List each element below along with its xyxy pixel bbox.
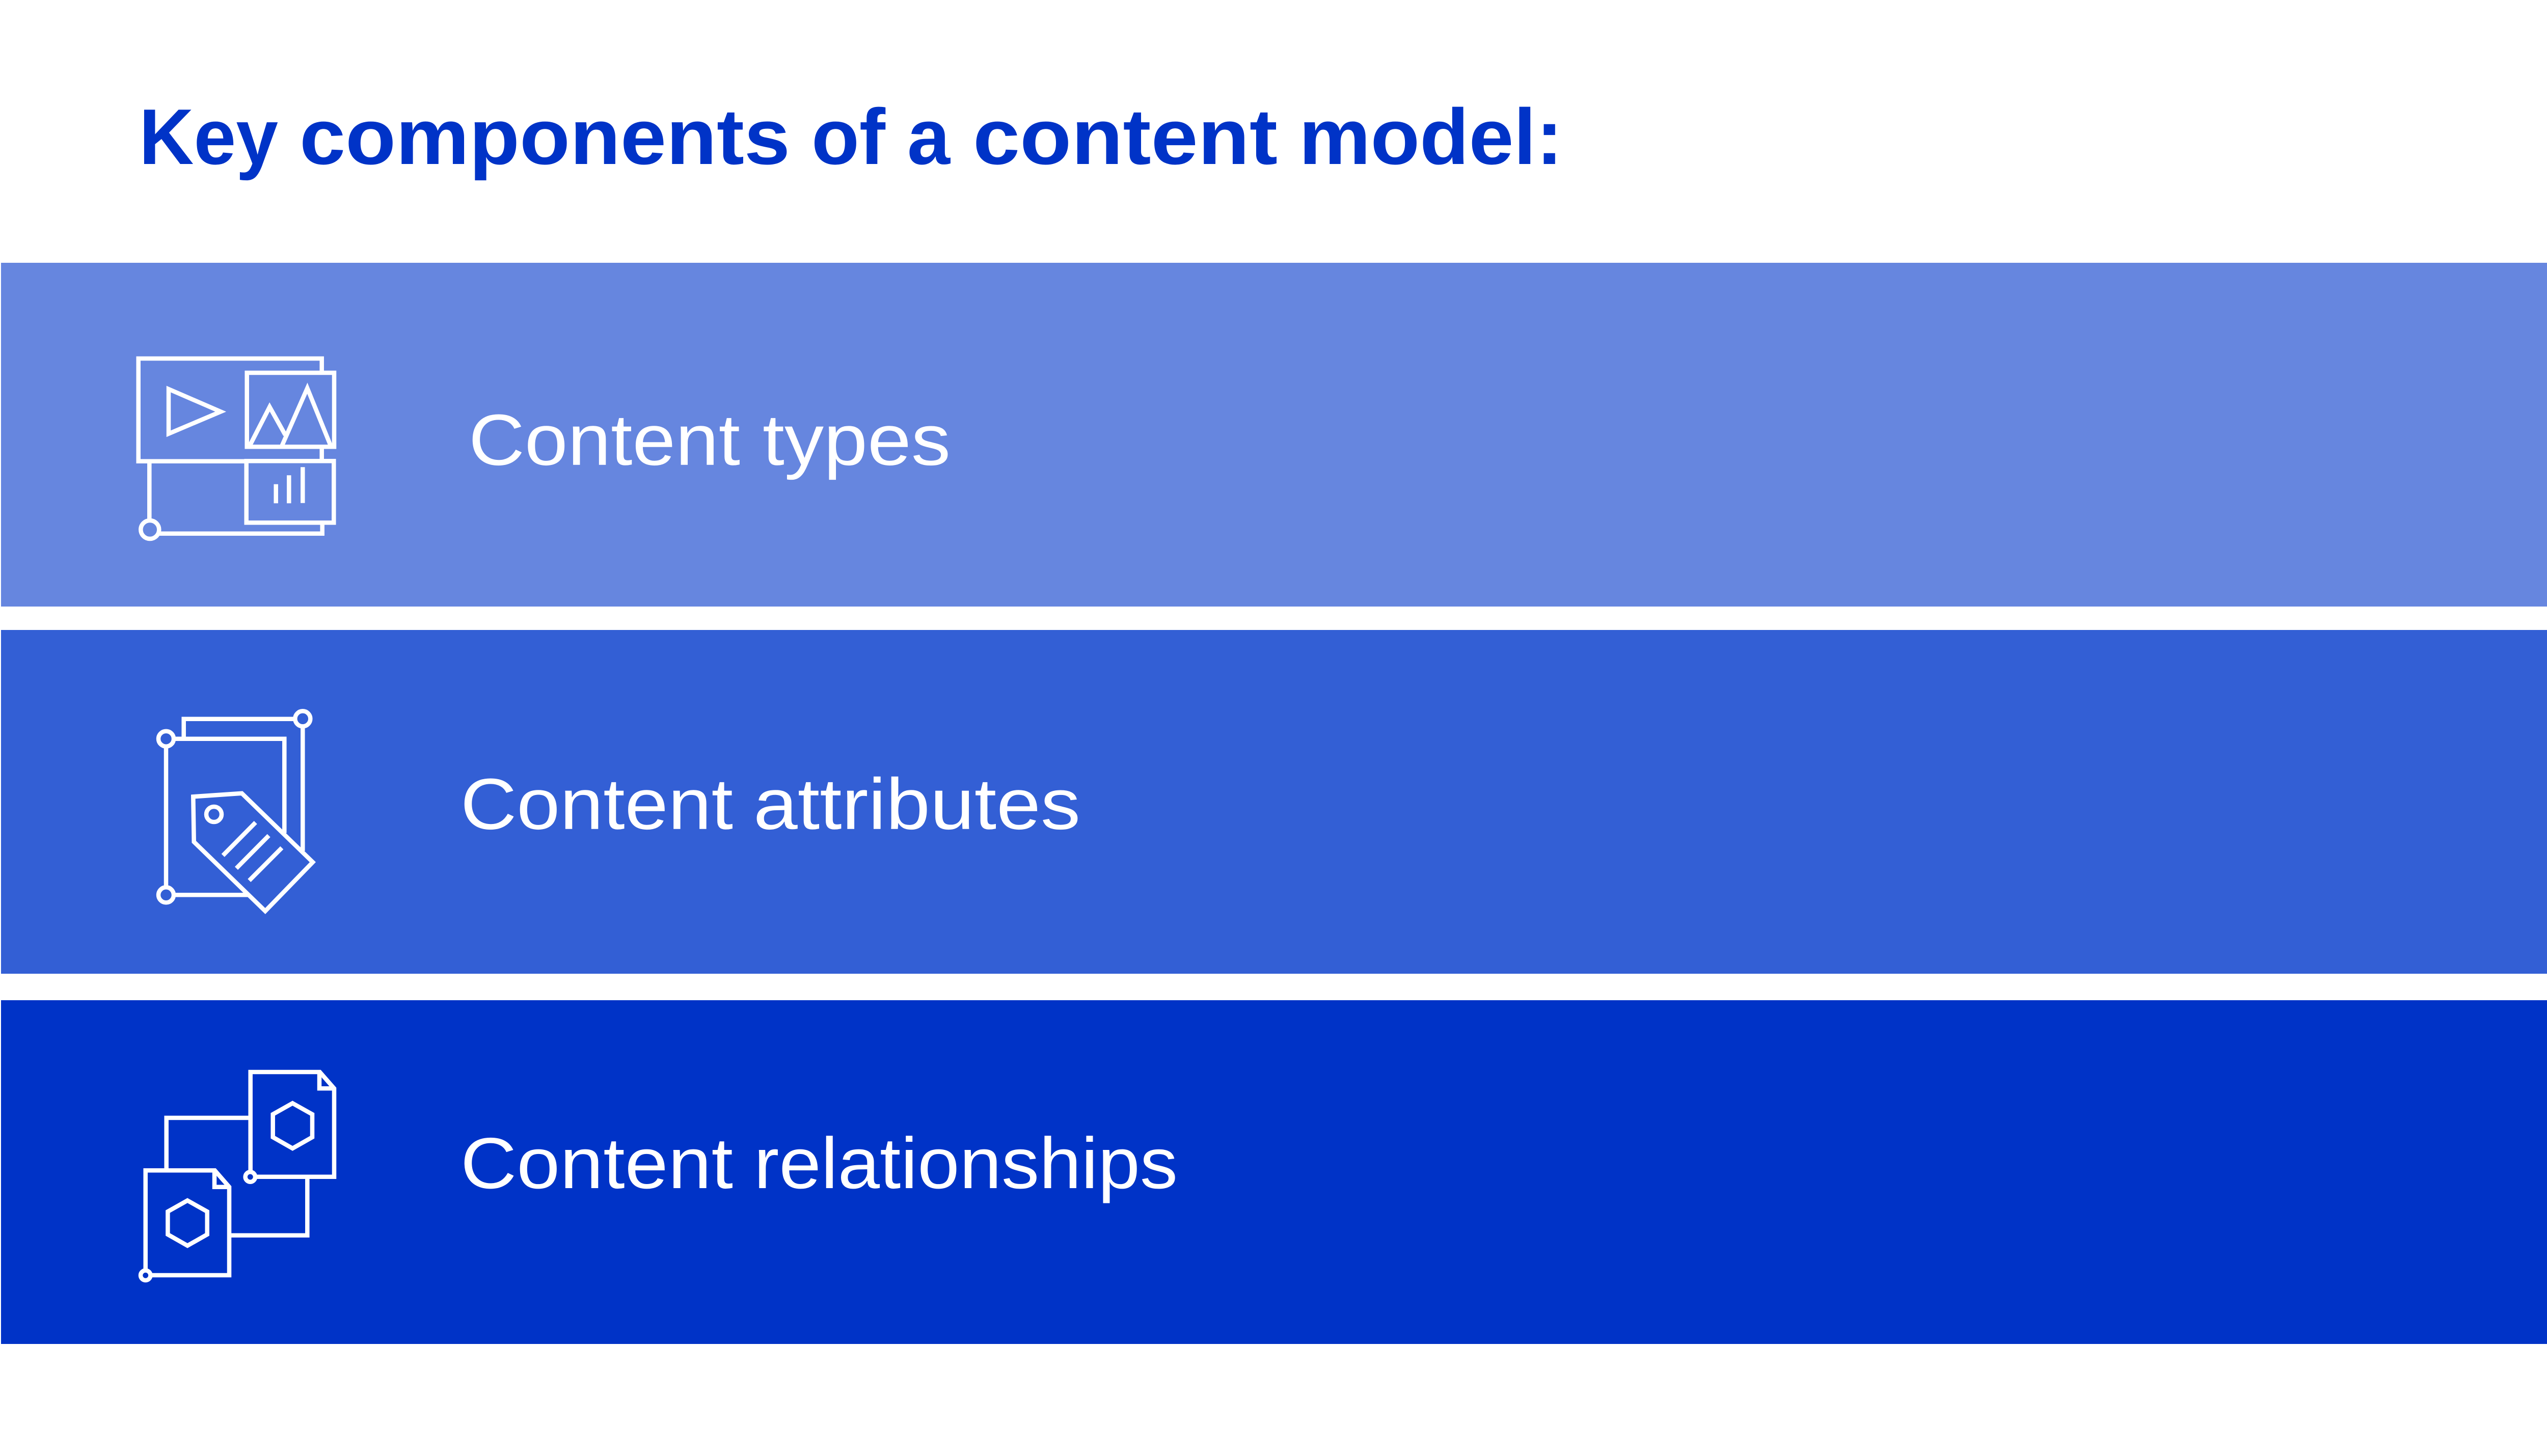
panel: content types [1,263,2547,607]
label: content attributes: Content [460,764,733,845]
icon: content types [139,359,334,539]
label: content types [469,400,951,481]
label: content attributes [460,764,1080,845]
label: content relationships: Content [460,1123,733,1204]
panel: content attributes [1,630,2547,974]
title: content [973,93,1278,181]
band: content types [1,263,2547,607]
label: content relationships: relationships [754,1123,1178,1204]
band: content relationships [1,1000,2547,1344]
title: components [300,93,790,181]
title: Key [139,93,278,181]
icon: content relationships [141,1072,334,1280]
label: content relationships [460,1123,1178,1204]
title [139,93,1563,181]
band: content attributes [1,630,2547,974]
label: content types: types [763,400,951,481]
title: of [811,93,885,181]
label: content types: Content [469,400,740,481]
label: content attributes: attributes [753,764,1080,845]
title: a [907,93,951,181]
icon: content attributes [158,711,313,911]
panel: content relationships [1,1000,2547,1344]
title: model: [1299,93,1563,181]
